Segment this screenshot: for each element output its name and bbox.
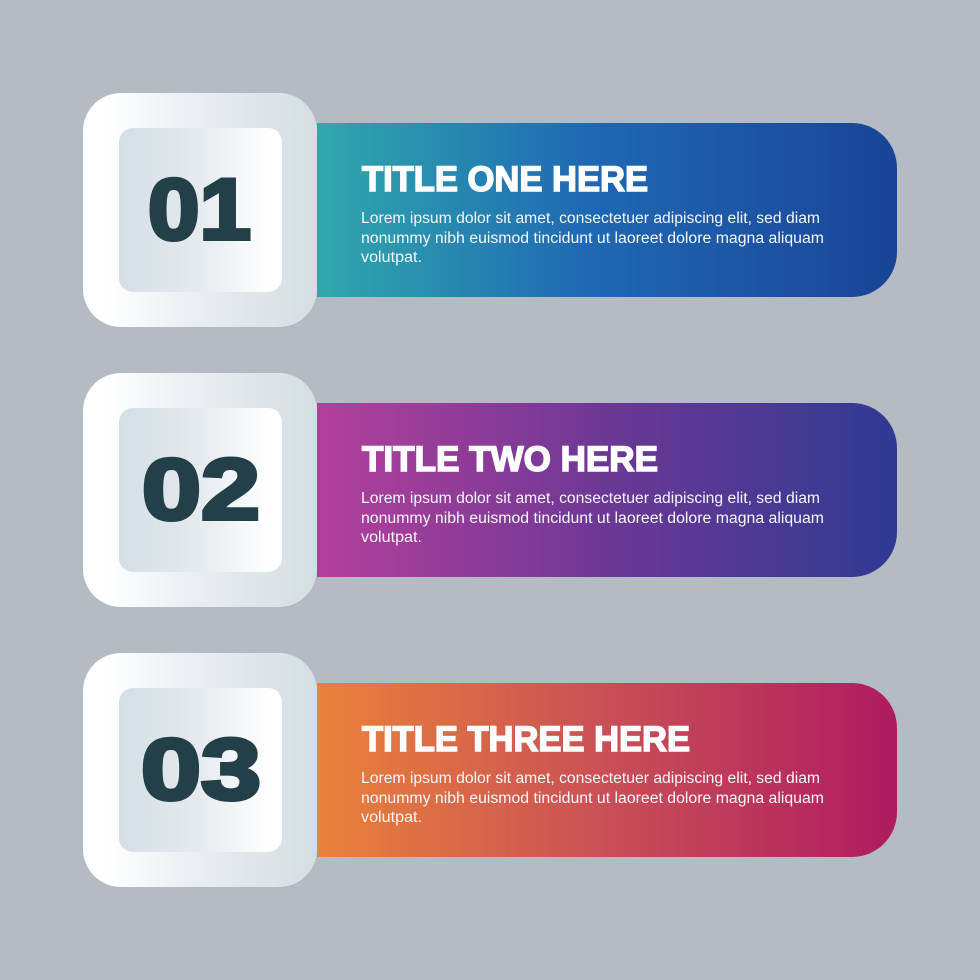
number tile: step 2 <box>83 373 317 607</box>
number tile: step 3 <box>83 653 317 887</box>
banner: step 2 <box>317 403 897 577</box>
body text: step 3: volutpat. <box>361 809 422 826</box>
panel: step 1 <box>83 93 897 327</box>
panel: step 2 <box>83 373 897 607</box>
body text: step 3 <box>361 770 824 826</box>
body text: step 1 <box>361 210 824 266</box>
heading: step 3: TITLE THREE HERE <box>362 720 690 759</box>
body text: step 1: Lorem ipsum dolor sit amet, consectetuer adipiscing elit, sed diam <box>361 210 820 227</box>
number tile: step 1 <box>83 93 317 327</box>
number: 01: 01 <box>148 162 251 258</box>
body text: step 2: nonummy nibh euismod tincidunt ut laoreet dolore magna aliquam <box>361 510 824 527</box>
banner: step 3 <box>317 683 897 857</box>
heading: step 2: TITLE TWO HERE <box>362 440 658 479</box>
body text: step 2: Lorem ipsum dolor sit amet, consectetuer adipiscing elit, sed diam <box>361 490 820 507</box>
heading: step 1: TITLE ONE HERE <box>362 160 648 199</box>
body text: step 3: Lorem ipsum dolor sit amet, consectetuer adipiscing elit, sed diam <box>361 770 820 787</box>
body text: step 3: nonummy nibh euismod tincidunt ut laoreet dolore magna aliquam <box>361 790 824 807</box>
body text: step 1: volutpat. <box>361 249 422 266</box>
banner: step 1 <box>317 123 897 297</box>
number: 03: 03 <box>141 722 261 818</box>
body text: step 1: nonummy nibh euismod tincidunt ut laoreet dolore magna aliquam <box>361 230 824 247</box>
body text: step 2 <box>361 490 824 546</box>
panel: step 3 <box>83 653 897 887</box>
number: 02: 02 <box>142 442 260 538</box>
body text: step 2: volutpat. <box>361 529 422 546</box>
